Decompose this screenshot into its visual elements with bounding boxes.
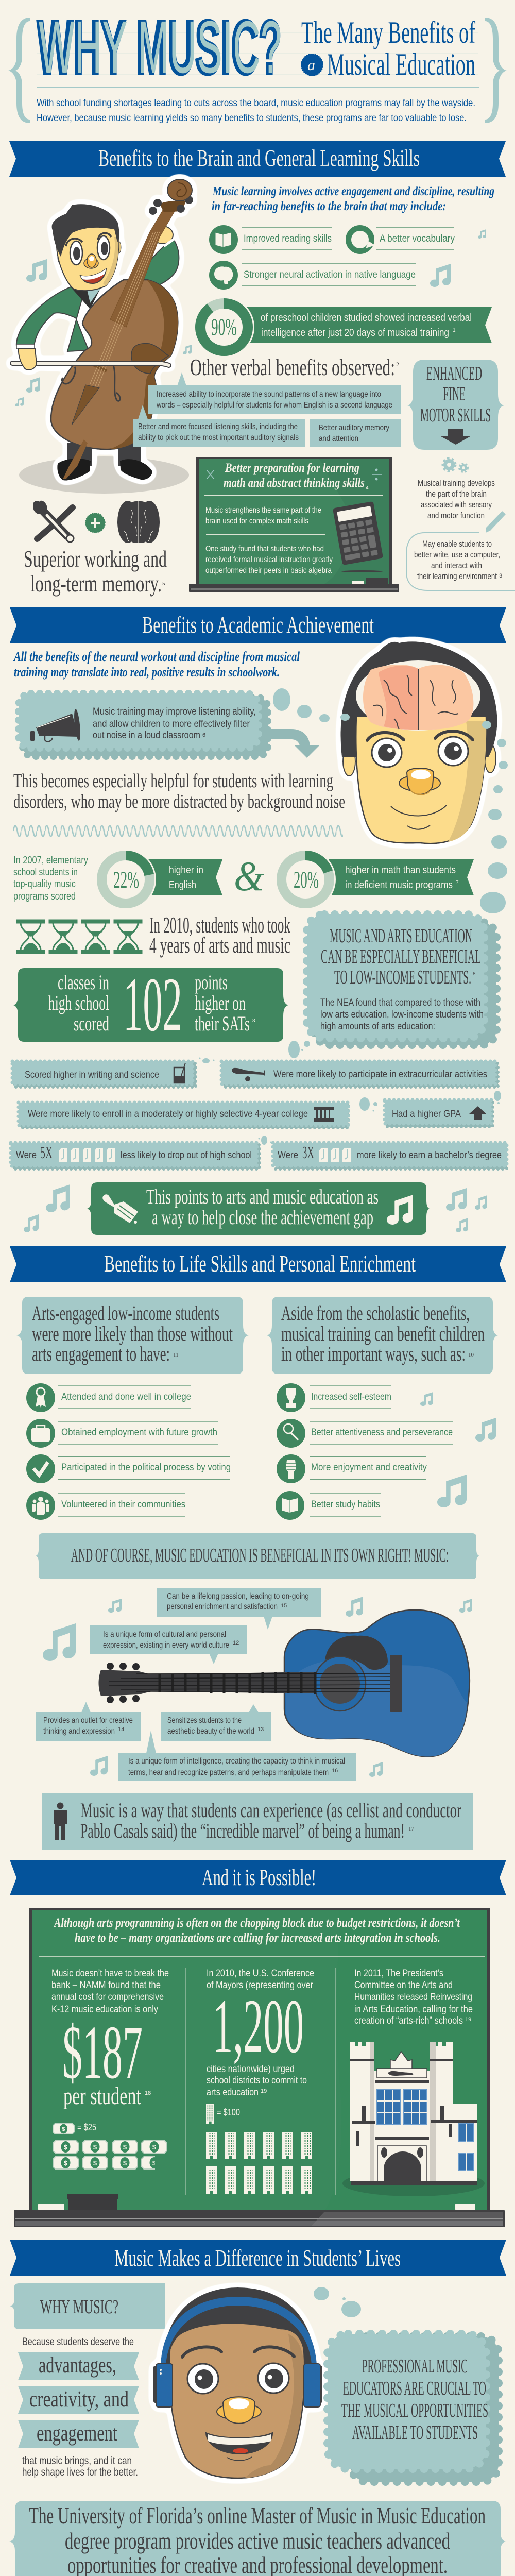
icon: pencil (486, 511, 506, 533)
cloud: listening ability: out noise in a loud classroom (93, 730, 200, 741)
text: 2010 students (149, 912, 290, 958)
callout: cultural expression: 12 (233, 1640, 239, 1646)
text: 2010 students: In 2010, students who took (149, 912, 290, 938)
eraser and chalk (38, 2194, 475, 2211)
script intro: have to be – many organizations are calling for increased arts integration in schools. (75, 1931, 440, 1945)
arrow up (469, 1106, 486, 1120)
icon: check mark (26, 1454, 55, 1483)
icon: book (209, 225, 238, 254)
panel: 102 points: scored (74, 1012, 109, 1035)
intro script: music learning (212, 184, 494, 213)
chalk and eraser (352, 578, 388, 585)
ribbon: english: higher in (169, 865, 203, 876)
banner: it is possible (10, 1860, 506, 1895)
ribbon: english: 22% (113, 867, 139, 893)
column: $187 (52, 1968, 169, 2170)
list: low-income outcomes: Obtained employment with future growth (61, 1427, 217, 1438)
icon: magnifier (277, 1419, 305, 1448)
panel: motor skills text and callout: 3 (499, 573, 502, 579)
text: students deserve: that music brings, and it can (22, 2455, 132, 2467)
panel: 102 points: points (195, 971, 228, 994)
head (58, 251, 64, 264)
panel: working and long-term memory (24, 501, 167, 597)
callout: form of intelligence: terms, hear and recognize patterns, and perhaps manipulate them (128, 1768, 329, 1777)
pill: drop out (11, 1143, 260, 1169)
cloud: listening ability: 6 (202, 732, 205, 738)
ampersand: & (234, 853, 264, 900)
ribbon: math: 7 (456, 880, 459, 886)
column: arts-rich schools: Committee on the Arts and (354, 1980, 453, 1991)
chalkboard: math and abstract thinking (189, 457, 399, 592)
stat: 2007 scores: programs scored (13, 891, 76, 902)
panel: motor skills text and callout: and motor function (427, 511, 485, 520)
pill: drop out: Were (16, 1150, 37, 1161)
pictogram: buildings (206, 2104, 312, 2194)
title (37, 5, 282, 90)
icon: trophy (277, 1383, 305, 1412)
panel: motor skills text and callout: and interact with (431, 561, 482, 570)
panel: achievement gap (87, 1182, 430, 1235)
column: 1,200: 19 (261, 2088, 267, 2094)
icon: music note (387, 1195, 413, 1225)
icon: people (26, 1491, 55, 1520)
text: learning disorders (13, 770, 345, 812)
ribbon: engagement: engagement (37, 2420, 117, 2446)
ribbon: math (275, 849, 474, 910)
column: $187: per student (63, 2082, 141, 2110)
panel: verbal benefit boxes: ability to pick out the most important auditory signals (138, 433, 299, 442)
callout: form of intelligence: 16 (332, 1768, 338, 1774)
script intro (53, 1916, 460, 1945)
column: $187: K-12 music education is only (52, 2004, 158, 2015)
callout: form of intelligence (118, 1731, 356, 1781)
column: 1,200: 1,200 (213, 1984, 304, 2069)
chalkboard: it is possible (14, 1908, 505, 2227)
icon: beaker (174, 1063, 185, 1083)
panel: University of Florida program (9, 2501, 506, 2576)
list: other benefits: Better attentiveness and perseverance (311, 1427, 453, 1438)
text: students deserve (18, 2336, 139, 2478)
callout: lifelong passion: personal enrichment and satisfaction (167, 1602, 278, 1611)
callout: creative outlet (36, 1702, 141, 1741)
callout: cultural expression: expression, existing in every world culture (103, 1641, 229, 1650)
cloud: low-income students: high amounts of arts education: (320, 1021, 435, 1032)
column: arts-rich schools: in Arts Education, calling for the (354, 2004, 473, 2015)
stat: 2007 scores: top-quality music (13, 878, 76, 890)
banner: academic achievement (10, 607, 506, 643)
chart: guitar (99, 1610, 470, 1756)
chalkboard: math and abstract thinking: brain used for complex math skills (205, 517, 308, 526)
panel: Pablo Casals quote (42, 1793, 473, 1850)
title: WHY MUSIC? (37, 5, 282, 90)
stat: 90 percent: intelligence after just 20 days of musical training (261, 327, 449, 338)
banner: it is possible: And it is Possible! (202, 1864, 316, 1890)
intro script: music learning: in far-reaching benefits to the brain that may include: (212, 199, 446, 213)
pill: higher GPA: Had a higher GPA (392, 1109, 461, 1120)
panel: 102 points: higher on (195, 991, 246, 1014)
column: $187: $187 (62, 2010, 143, 2095)
intro text (37, 98, 475, 124)
icon: gears (443, 459, 467, 471)
icon: paintbrush (102, 1194, 138, 1224)
stat: 90 percent: 1 (453, 328, 456, 333)
panel: other ways: 10 (468, 1352, 474, 1358)
icon: calculator (333, 501, 383, 565)
chalkboard: math and abstract thinking: Better preparation for learning (225, 461, 359, 475)
intro script: neural workout: All the benefits of the neural workout and discipline from musical (13, 649, 300, 664)
column: arts-rich schools: creation of “arts-rich” schools (354, 2015, 463, 2026)
pill: selective college (19, 1103, 348, 1128)
text: learning disorders: This becomes especially helpful for students with learning (13, 770, 333, 792)
ribbon: english: English (169, 879, 196, 891)
chalkboard: math and abstract thinking: Music strengthens the same part of the (205, 506, 321, 515)
icon: college building (314, 1107, 334, 1122)
list: improved skills: A better vocabulary (380, 233, 455, 244)
ribbon: advantages: advantages, (39, 2352, 116, 2378)
panel: arts-engaged students: were more likely than those without (32, 1322, 233, 1345)
icons: notes by lists (420, 1392, 496, 1507)
panel: why music box: WHY MUSIC? (40, 2296, 118, 2318)
panel: 102 points: their SATs (195, 1012, 250, 1035)
pill: writing and science: Scored higher in writing and science (25, 1070, 159, 1080)
ribbon: math: in deficient music programs (345, 879, 453, 891)
column: $187: 18 (145, 2090, 151, 2096)
chalk tray (14, 2210, 505, 2227)
banner: brain and learning (9, 141, 506, 177)
callout: form of intelligence: Is a unique form of intelligence, creating the capacity to think in musical (128, 1757, 345, 1766)
list: other benefits: Increased self-esteem (311, 1392, 391, 1402)
icon: wrench and screwdriver (33, 501, 74, 542)
panel: verbal benefit boxes: Increased ability to incorporate the sound patterns of a new language into (157, 390, 381, 399)
panel: other ways (267, 1297, 498, 1374)
right curly bracket (485, 18, 507, 123)
panel: achievement gap: This points to arts and music education as (146, 1185, 379, 1208)
ribbon: math: 20% (294, 867, 319, 893)
panel: motor skills text and callout: May enable students to (422, 539, 492, 549)
pill: selective college: Were more likely to enroll in a moderately or highly selective 4-year college (28, 1109, 308, 1120)
cloud: listening ability: and allow children to more effectively filter (93, 719, 250, 730)
panel: motor skills text and callout (406, 459, 515, 590)
headphone cups (153, 2364, 322, 2407)
callout: aesthetic beauty: aesthetic beauty of the world (167, 1727, 254, 1736)
pictogram: buildings: = $100 (217, 2107, 240, 2117)
panel: 102 points: high school (48, 991, 109, 1014)
panel: achievement gap: a way to help close the achievement gap (152, 1206, 373, 1229)
list: other benefits: Better study habits (311, 1499, 380, 1510)
icon: megaphone (30, 709, 81, 741)
icon: briefcase (26, 1419, 55, 1448)
column: 1,200: school districts to commit to (207, 2075, 307, 2086)
list: low-income outcomes (26, 1383, 231, 1520)
icons: notes beside achievement gap (24, 1184, 487, 1232)
list: other benefits (276, 1383, 453, 1520)
icons: hourglasses (17, 920, 142, 953)
column: 1,200: of Mayors (representing over (207, 1980, 314, 1991)
column: 1,200 (206, 1968, 314, 2194)
column: $187: annual cost for comprehensive (52, 1992, 164, 2003)
column: $187: Music doesn’t have to break the (52, 1968, 169, 1979)
chalkboard: math and abstract thinking: received formal musical instruction greatly (205, 555, 333, 564)
panel: working and long-term memory: 5 (162, 581, 165, 587)
stat: 2007 scores (13, 849, 474, 910)
list: improved skills: Stronger neural activation in native language (244, 269, 416, 280)
cloud: low-income students: The NEA found that compared to those with (320, 997, 480, 1008)
column: arts-rich schools (342, 1968, 485, 2196)
callout: creative outlet: 14 (118, 1726, 124, 1733)
callout: creative outlet: Provides an outlet for creative (43, 1716, 133, 1725)
header (8, 5, 507, 124)
list: improved skills (209, 225, 455, 290)
pill: bachelor's degree: 3X (302, 1143, 314, 1162)
panel: 102 points: classes in (58, 971, 109, 994)
scroll, hands and body of cello (67, 443, 92, 466)
chalk tray (189, 584, 399, 592)
column: arts-rich schools: In 2011, The President’s (354, 1968, 443, 1979)
callout: cultural expression: Is a unique form of cultural and personal (103, 1630, 226, 1639)
icon: school building (342, 2042, 485, 2196)
panel: enhanced fine motor skills (407, 360, 504, 450)
column: $187: bank – NAMM found that the (52, 1980, 161, 1991)
character: head with headphones (153, 2287, 322, 2478)
panel: verbal benefit boxes: and attention (319, 434, 358, 443)
cloud: listening ability (19, 693, 319, 758)
pill: drop out: less likely to drop out of high school (121, 1150, 252, 1161)
stat: 2007 scores: In 2007, elementary (13, 855, 88, 866)
guitar headstock and neck (99, 1663, 390, 1703)
pictogram: money: = $25 (77, 2122, 96, 2132)
arrow down (441, 429, 470, 445)
panel: arts-engaged students: arts engagement to have: (32, 1342, 170, 1365)
heading: other verbal benefits: 2 (396, 361, 399, 368)
pictogram: money (53, 2122, 167, 2170)
callout: aesthetic beauty: 13 (258, 1726, 264, 1733)
text: learning disorders: disorders, who may be more distracted by background noise (13, 791, 345, 812)
panel: working and long-term memory: long-term memory. (30, 570, 162, 597)
heading: other verbal benefits: Other verbal benefits observed: (190, 354, 395, 380)
list: low-income outcomes: Participated in the political process by voting (61, 1462, 231, 1473)
panel: arts-engaged students (16, 1297, 249, 1374)
title: WHY MUSIC? (39, 6, 282, 89)
callout: lifelong passion (157, 1588, 321, 1630)
stat: 90 percent: of preschool children studied showed increased verbal (261, 312, 472, 324)
icon: person (54, 1802, 67, 1840)
banner: makes a difference (10, 2240, 506, 2276)
subtitle: a (307, 57, 315, 74)
cloud: low-income students: low arts education, low-income students with (320, 1009, 484, 1020)
list: low-income outcomes: Attended and done well in college (61, 1392, 191, 1402)
banner: academic achievement: Benefits to Academic Achievement (142, 612, 374, 638)
panel: motor skills text and callout: Musical training develops (418, 478, 495, 488)
stat: 90 percent: 90% (211, 314, 237, 341)
icon: bat and ball (232, 1068, 265, 1081)
icon: plus badge (85, 513, 105, 533)
subtitle (301, 15, 475, 81)
bubbles near headphones (314, 2287, 361, 2317)
ribbon: english (95, 849, 222, 910)
callout: cultural expression (90, 1625, 247, 1664)
callout: lifelong passion: Can be a lifelong passion, leading to on-going (167, 1592, 309, 1601)
pill: drop out: 5X (40, 1143, 53, 1162)
list: low-income outcomes: Volunteered in their communities (61, 1499, 185, 1510)
cloud: professional educators (328, 2334, 499, 2482)
icon: brain silhouette (117, 501, 160, 543)
list: other benefits: More enjoyment and creativity (311, 1462, 427, 1473)
chalkboard: math and abstract thinking: One study found that students who had (205, 545, 324, 553)
intro script: neural workout: training may translate into real, positive results in schoolwork. (14, 665, 280, 680)
callout: creative outlet: thinking and expression (43, 1727, 115, 1736)
pill: extracurricular (221, 1061, 498, 1087)
icon: light bulb (277, 1454, 305, 1483)
text: students deserve: Because students deserve the (22, 2336, 134, 2348)
column: arts-rich schools: 19 (465, 2016, 471, 2023)
column: 1,200: arts education (207, 2087, 259, 2098)
callout: lifelong passion: 15 (281, 1603, 287, 1609)
icons: diplomas (319, 1148, 351, 1162)
panel: arts-engaged students: Arts-engaged low-income students (32, 1301, 219, 1325)
panel: working and long-term memory: Superior working and (24, 546, 167, 572)
left curly bracket (8, 18, 30, 123)
pill: bachelor's degree: Were (278, 1150, 298, 1161)
panel: enhanced fine motor skills: FINE (443, 383, 466, 405)
stat: 2007 scores: school students in (13, 867, 78, 878)
panel: 102 points (13, 962, 288, 1047)
chalkboard: math and abstract thinking: math and abstract thinking skills (224, 476, 365, 490)
panel: why music box (10, 2283, 165, 2329)
cloud: low-income students: 8 (473, 971, 476, 977)
panel: of course (36, 1533, 479, 1579)
icon: open book (276, 1491, 304, 1520)
character: cellist (12, 179, 193, 494)
cloud: listening ability: Music training may improve listening ability, (93, 706, 256, 717)
intro script: neural workout (13, 649, 300, 680)
pill: writing and science (12, 1061, 196, 1087)
icon: speech bubble (346, 225, 375, 254)
panel: motor skills text and callout: the part of the brain (426, 489, 487, 499)
text: students deserve: help shape lives for the better. (22, 2466, 138, 2478)
icon: brain (209, 261, 238, 290)
pill: higher GPA (385, 1100, 493, 1127)
thought bubbles around head (273, 688, 508, 913)
text: 2010 students: 4 years of arts and music (149, 933, 290, 958)
pill: extracurricular: Were more likely to participate in extracurricular activities (273, 1069, 487, 1080)
panel: 102 points: 102 (123, 962, 182, 1047)
column: arts-rich schools: Humanities released Reinvesting (354, 1992, 472, 2003)
panel: 102 points: 8 (252, 1018, 255, 1024)
panel: Pablo Casals quote: 17 (408, 1826, 414, 1832)
icons: notes around guitar (43, 1597, 472, 1777)
character: head with brain (340, 641, 497, 843)
icons: diplomas (59, 1148, 115, 1162)
stat: 90 percent (194, 297, 492, 358)
panel: arts-engaged students: 11 (173, 1352, 179, 1358)
column: 1,200: cities nationwide) urged (207, 2064, 295, 2075)
icon: music notes around section one (15, 229, 486, 406)
icon: ribbon award (26, 1383, 55, 1412)
ribbon: math: higher in math than students (345, 865, 456, 876)
list: improved skills: Improved reading skills (244, 233, 332, 244)
pill: bachelor's degree (273, 1143, 507, 1169)
panel: verbal benefit boxes: words – especially helpful for students for whom English is a second language (156, 401, 392, 410)
chalkboard: math and abstract thinking: outperformed their peers in basic algebra (205, 566, 332, 575)
panel: verbal benefit boxes: Better auditory memory (319, 423, 389, 432)
panel: verbal benefit boxes (133, 372, 401, 447)
panel: verbal benefit boxes: Better and more focused listening skills, including the (138, 422, 298, 431)
ribbon: creativity: creativity, and (29, 2386, 129, 2412)
bubbles between pills (199, 1057, 501, 1112)
column: 1,200: In 2010, the U.S. Conference (207, 1968, 314, 1979)
chalkboard: math and abstract thinking: 4 (366, 485, 369, 491)
callout: aesthetic beauty: Sensitizes students to the (167, 1716, 242, 1725)
arrow (265, 729, 319, 758)
banner: life skills (10, 1246, 506, 1282)
panel: motor skills text and callout: associated with sensory (421, 500, 492, 510)
cloud: low-income students (288, 914, 496, 1058)
callout: aesthetic beauty (161, 1704, 271, 1741)
